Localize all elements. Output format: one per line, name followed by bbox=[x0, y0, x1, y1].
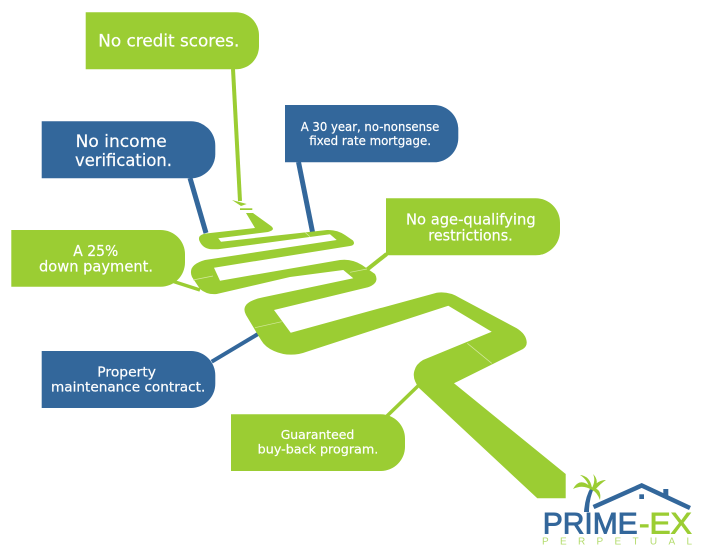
connector: 30 year mortgage bbox=[298, 162, 312, 232]
connector: buy-back program bbox=[387, 385, 419, 416]
icon: house roof bbox=[594, 486, 690, 508]
callout: buy-back program bbox=[231, 414, 405, 471]
callout: 30 year mortgage: fixed rate mortgage. bbox=[309, 133, 431, 148]
connector: maintenance contract bbox=[212, 334, 258, 362]
callout: no credit scores: No credit scores. bbox=[98, 32, 239, 52]
icon: palm tree bbox=[573, 474, 606, 512]
callout: maintenance contract bbox=[42, 351, 215, 408]
connector: income verification bbox=[190, 178, 206, 233]
callout: maintenance contract: Property bbox=[97, 365, 156, 381]
connector: down payment bbox=[172, 281, 200, 290]
callout: no age-qualifying restrictions: No age-qualifying bbox=[406, 210, 536, 228]
callout: 30 year mortgage bbox=[285, 105, 458, 162]
callout: down payment bbox=[11, 230, 185, 287]
callout: no income verification bbox=[42, 121, 215, 178]
callout: no income verification: No income bbox=[76, 132, 167, 152]
callout: no age-qualifying restrictions bbox=[386, 198, 560, 255]
callout: no credit scores bbox=[86, 12, 259, 69]
logo wordmark bbox=[543, 507, 692, 540]
callout: buy-back program: buy-back program. bbox=[258, 442, 378, 457]
road seams bbox=[193, 232, 492, 363]
logo tagline: PERPETUAL bbox=[542, 536, 692, 548]
callout: down payment: A 25% bbox=[73, 242, 118, 260]
connector: age-qualifying bbox=[364, 254, 387, 272]
logo wordmark: -EX bbox=[639, 507, 692, 540]
callout: no income verification: verification. bbox=[75, 151, 172, 171]
callout: down payment: down payment. bbox=[39, 258, 153, 276]
callout: 30 year mortgage: A 30 year, no-nonsense bbox=[301, 119, 440, 134]
callout: maintenance contract: maintenance contract. bbox=[51, 380, 205, 396]
callout: no age-qualifying restrictions: restrictions. bbox=[428, 227, 513, 245]
callout: buy-back program: Guaranteed bbox=[281, 427, 354, 442]
logo wordmark: PRIME bbox=[543, 507, 638, 540]
connector: credit scores bbox=[233, 69, 240, 201]
logo: Prime-Ex Perpetual bbox=[542, 474, 692, 548]
winding road bbox=[191, 200, 566, 498]
